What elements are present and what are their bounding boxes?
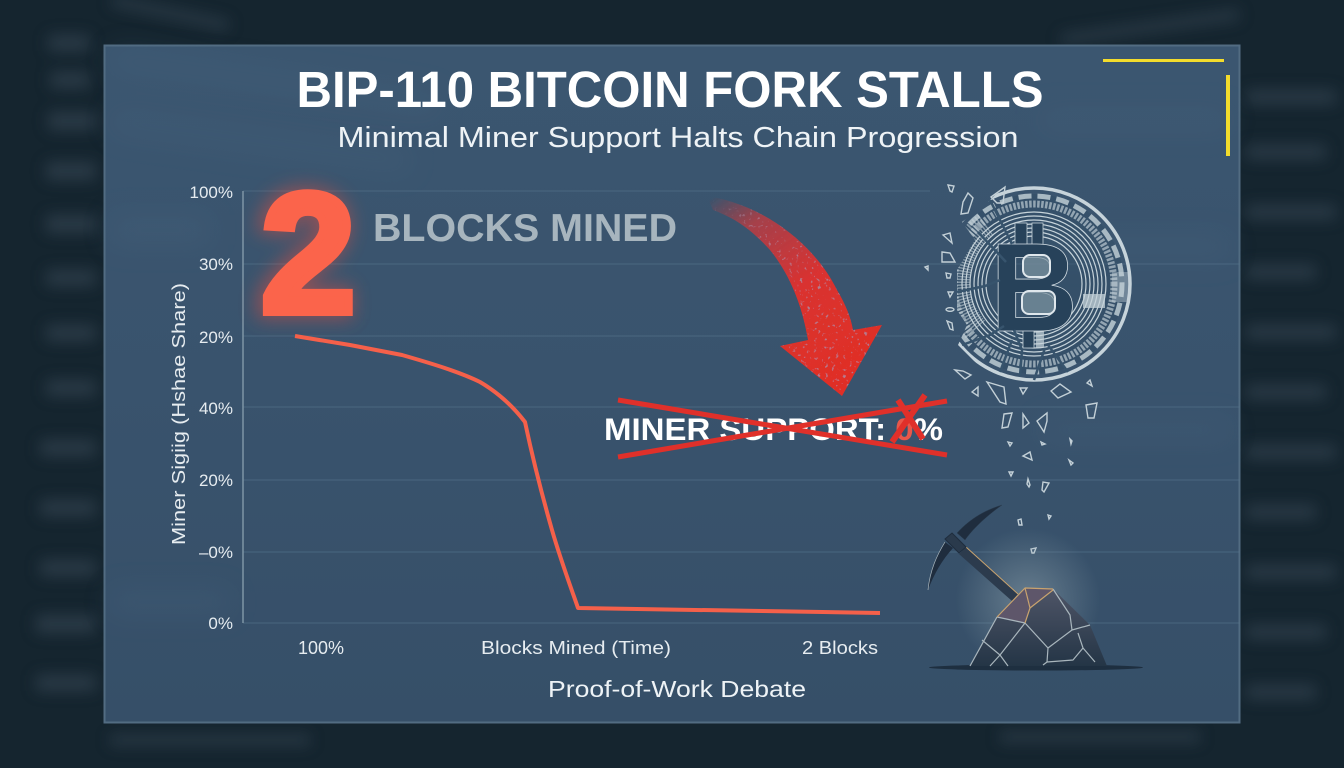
y-axis ticks: 40% <box>199 399 233 418</box>
x-axis ticks <box>298 638 878 658</box>
data line <box>295 336 880 613</box>
y-axis ticks: –0% <box>199 543 233 562</box>
gridlines and axis <box>243 191 1240 623</box>
big number 2: 2 <box>258 159 353 349</box>
big number 2: 2 <box>261 159 356 349</box>
cracks <box>957 200 1068 380</box>
corner bracket <box>1103 59 1230 156</box>
line chart <box>168 183 1240 702</box>
shards <box>925 185 1097 553</box>
y-axis ticks <box>190 183 233 633</box>
icon: shattered bitcoin <box>925 185 1130 553</box>
x-axis ticks: Blocks Mined (Time) <box>481 638 671 658</box>
pickaxe <box>928 505 1018 601</box>
coin <box>938 188 1130 380</box>
panel <box>104 46 1240 722</box>
x-axis ticks: 2 Blocks <box>802 638 878 658</box>
miner support struck through <box>604 395 947 457</box>
bitcoin symbol: B <box>990 217 1078 358</box>
y-axis title: Miner Sigiig (Hshae Share) <box>168 283 189 545</box>
title: BIP-110 BITCOIN FORK STALLS <box>296 61 1044 118</box>
icon: pickaxe and rock <box>928 505 1143 672</box>
x-axis ticks: 100% <box>298 638 344 658</box>
y-axis ticks: 20% <box>199 471 233 490</box>
x-axis title: Proof-of-Work Debate <box>548 676 806 702</box>
rock <box>970 588 1107 666</box>
blocks mined label: BLOCKS MINED <box>373 207 677 250</box>
y-axis ticks: 100% <box>190 183 233 202</box>
ground <box>929 664 1143 670</box>
subtitle: Minimal Miner Support Halts Chain Progression <box>338 122 1018 154</box>
glow <box>956 528 1100 672</box>
miner support struck through: MINER SUPPORT: 0% <box>604 411 943 447</box>
bitcoin symbol <box>990 217 1130 358</box>
red arrow <box>707 196 882 396</box>
y-axis ticks: 20% <box>199 328 233 347</box>
y-axis ticks: 30% <box>199 255 233 274</box>
y-axis ticks: 0% <box>208 614 233 633</box>
